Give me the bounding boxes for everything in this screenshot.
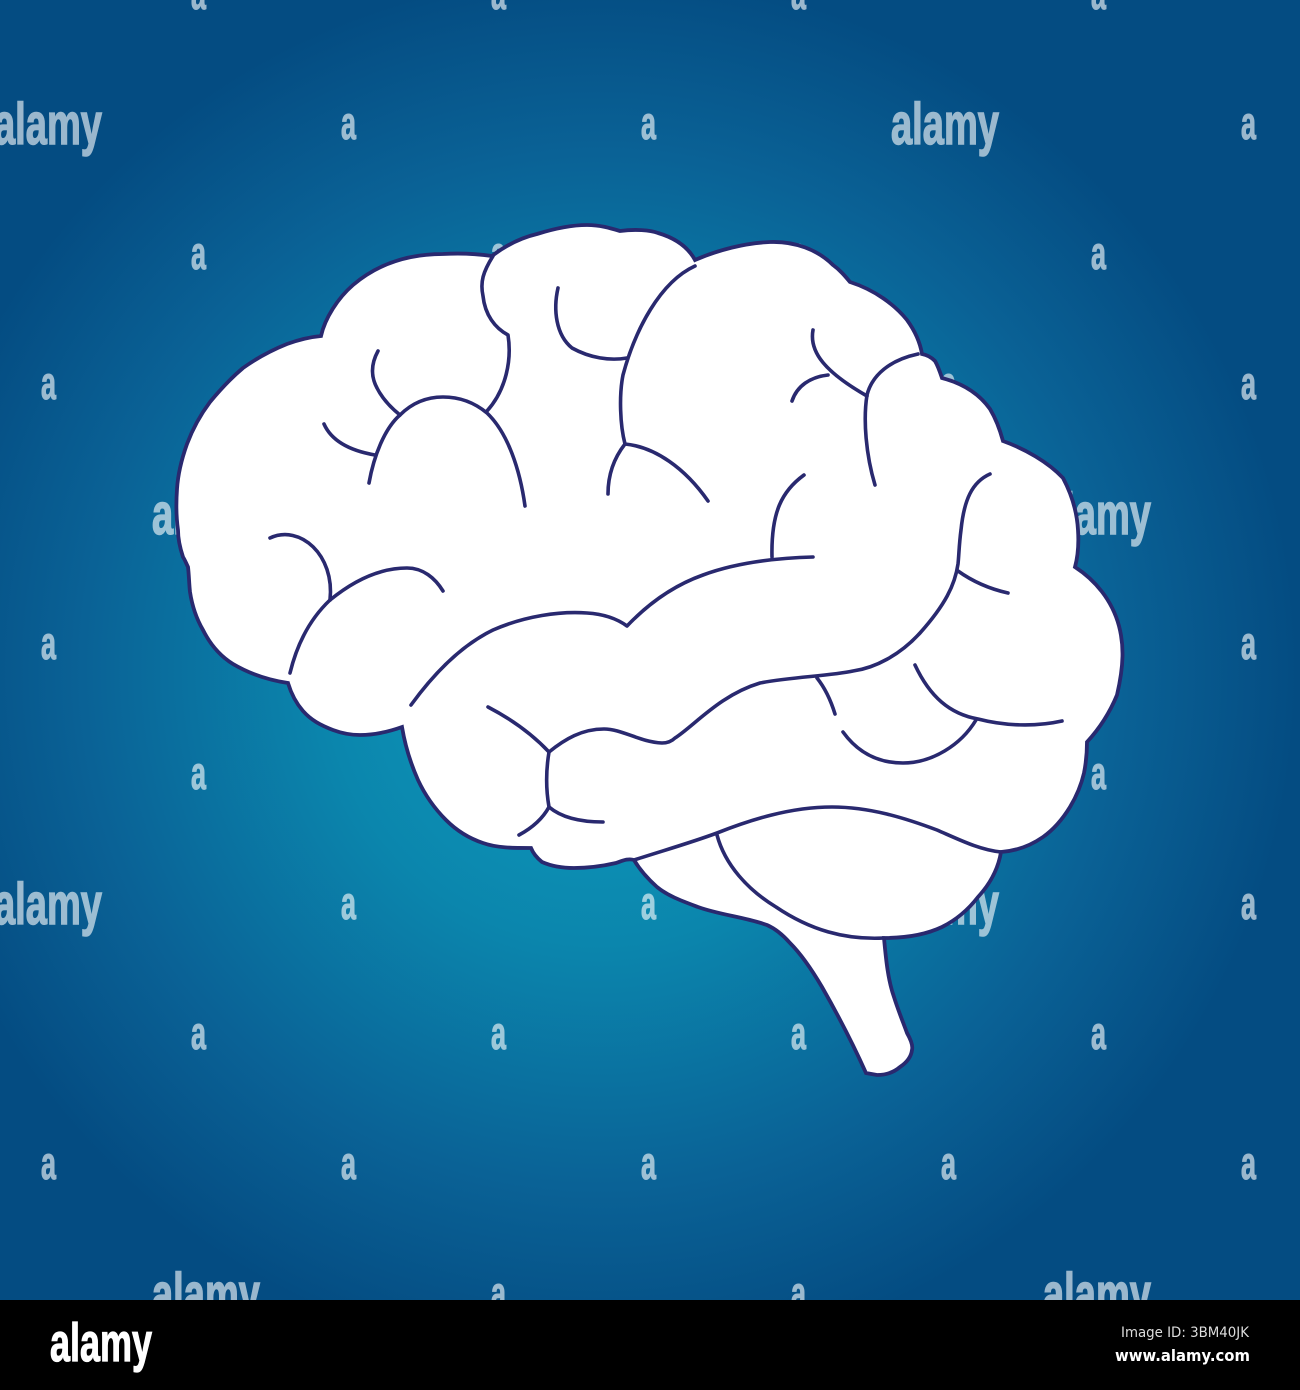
watermark pattern: a — [341, 1137, 356, 1189]
watermark pattern: a — [491, 227, 506, 279]
watermark pattern: a — [191, 1007, 206, 1059]
brain fold lines — [270, 256, 1062, 938]
watermark pattern: alamy — [152, 1262, 260, 1327]
watermark pattern: a — [491, 1267, 506, 1319]
footer bar — [0, 1300, 1300, 1390]
watermark pattern: a — [1241, 357, 1256, 409]
watermark pattern: a — [191, 747, 206, 799]
watermark pattern: a — [941, 357, 956, 409]
watermark pattern: a — [791, 227, 806, 279]
watermark pattern: a — [41, 617, 56, 669]
watermark pattern: a — [1241, 97, 1256, 149]
watermark pattern: a — [1091, 227, 1106, 279]
website: www.alamy.com — [1115, 1346, 1250, 1365]
watermark pattern: a — [41, 1137, 56, 1189]
watermark pattern: a — [1091, 1007, 1106, 1059]
watermark pattern: alamy — [891, 872, 999, 937]
watermark pattern: a — [341, 877, 356, 929]
watermark pattern: a — [41, 357, 56, 409]
watermark pattern: alamy — [891, 92, 999, 157]
watermark pattern: a — [1241, 1137, 1256, 1189]
watermark pattern: alamy — [1043, 1262, 1151, 1327]
watermark pattern: a — [641, 877, 656, 929]
watermark pattern: a — [941, 1137, 956, 1189]
brain silhouette — [176, 225, 1123, 1075]
watermark pattern: a — [341, 97, 356, 149]
brain illustration — [176, 225, 1123, 1075]
watermark pattern: a — [1241, 617, 1256, 669]
watermark pattern: a — [641, 1137, 656, 1189]
watermark pattern: a — [491, 1007, 506, 1059]
watermark pattern: a — [1091, 747, 1106, 799]
watermark pattern: alamy — [152, 482, 260, 547]
watermark pattern: alamy — [1043, 482, 1151, 547]
watermark pattern: a — [641, 97, 656, 149]
watermark pattern: a — [191, 227, 206, 279]
watermark pattern: a — [791, 1007, 806, 1059]
watermark pattern: a — [791, 1267, 806, 1319]
watermark pattern: a — [1241, 877, 1256, 929]
footer logo: alamy — [50, 1313, 152, 1373]
image id: Image ID: 3BM40JK — [1121, 1325, 1250, 1341]
